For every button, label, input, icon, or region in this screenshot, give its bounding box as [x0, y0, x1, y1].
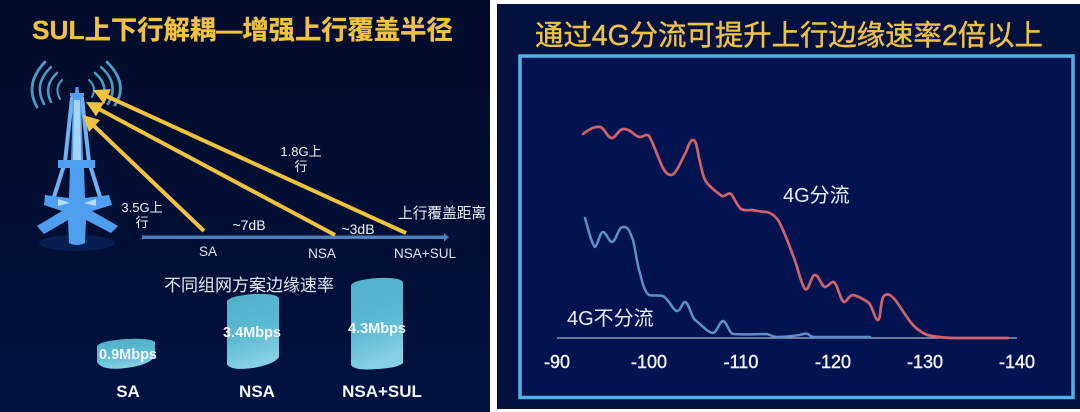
x axis ticks: -110 — [724, 352, 758, 372]
label: 3.5G uplink: 3.5G上 — [121, 200, 163, 215]
label: 1.8G uplink: 行 — [294, 159, 308, 174]
x axis ticks: -100 — [631, 352, 667, 372]
cylinder: SA 0.9Mbps — [97, 339, 157, 369]
label: 4G offload: 4G分流 — [783, 184, 850, 207]
cylinder: NSA+SUL 4.3Mbps — [348, 278, 406, 370]
right panel title: 通过4G分流可提升上行边缘速率2倍以上 — [535, 20, 1043, 52]
label: 3.5G uplink: 行 — [135, 215, 149, 230]
label: 1.8G uplink: 1.8G上 — [280, 144, 322, 159]
axis label: NSA: NSA — [308, 246, 336, 261]
arrow: NSA uplink — [86, 102, 335, 235]
icon: radio tower with signal waves — [32, 62, 120, 251]
left panel title: SUL上下行解耦—增强上行覆盖半径 — [32, 15, 453, 45]
label: uplink coverage distance: 上行覆盖距离 — [398, 205, 486, 222]
x axis ticks: -130 — [907, 352, 943, 372]
cylinder: NSA 3.4Mbps: 3.4Mbps — [223, 325, 281, 341]
cylinder: NSA+SUL 4.3Mbps: 4.3Mbps — [348, 321, 406, 337]
x axis ticks: -90 — [544, 352, 570, 372]
label: 4G no offload: 4G不分流 — [567, 307, 654, 330]
tower body — [37, 87, 118, 245]
scheme label: NSA: NSA — [239, 382, 275, 401]
label: 3dB gap: ~3dB — [341, 221, 375, 237]
axis line — [557, 337, 1017, 339]
scheme label: SA: SA — [116, 382, 140, 401]
cylinder: SA 0.9Mbps: 0.9Mbps — [99, 347, 157, 363]
arrow: 1.8G uplink — [93, 89, 406, 233]
label: 7dB gap: ~7dB — [232, 217, 266, 233]
x axis ticks — [544, 352, 1035, 372]
line: 4G with offload — [583, 127, 1008, 338]
cylinder: NSA 3.4Mbps — [223, 294, 281, 369]
x axis ticks: -120 — [815, 352, 851, 372]
panel: 4G offload — [497, 4, 1080, 409]
coverage distance axis — [142, 233, 449, 242]
axis label: NSA+SUL: NSA+SUL — [394, 246, 456, 261]
x axis ticks: -140 — [999, 352, 1035, 372]
scheme label: NSA+SUL: NSA+SUL — [342, 382, 422, 401]
arrow: 3.5G uplink — [83, 115, 204, 231]
axis label: SA: SA — [199, 244, 217, 259]
chart: uplink edge rate — [520, 56, 1073, 398]
panel: SUL uplink decoupling — [0, 0, 490, 412]
line: 4G without offload — [585, 218, 870, 337]
chart subtitle: 不同组网方案边缘速率 — [164, 276, 334, 295]
